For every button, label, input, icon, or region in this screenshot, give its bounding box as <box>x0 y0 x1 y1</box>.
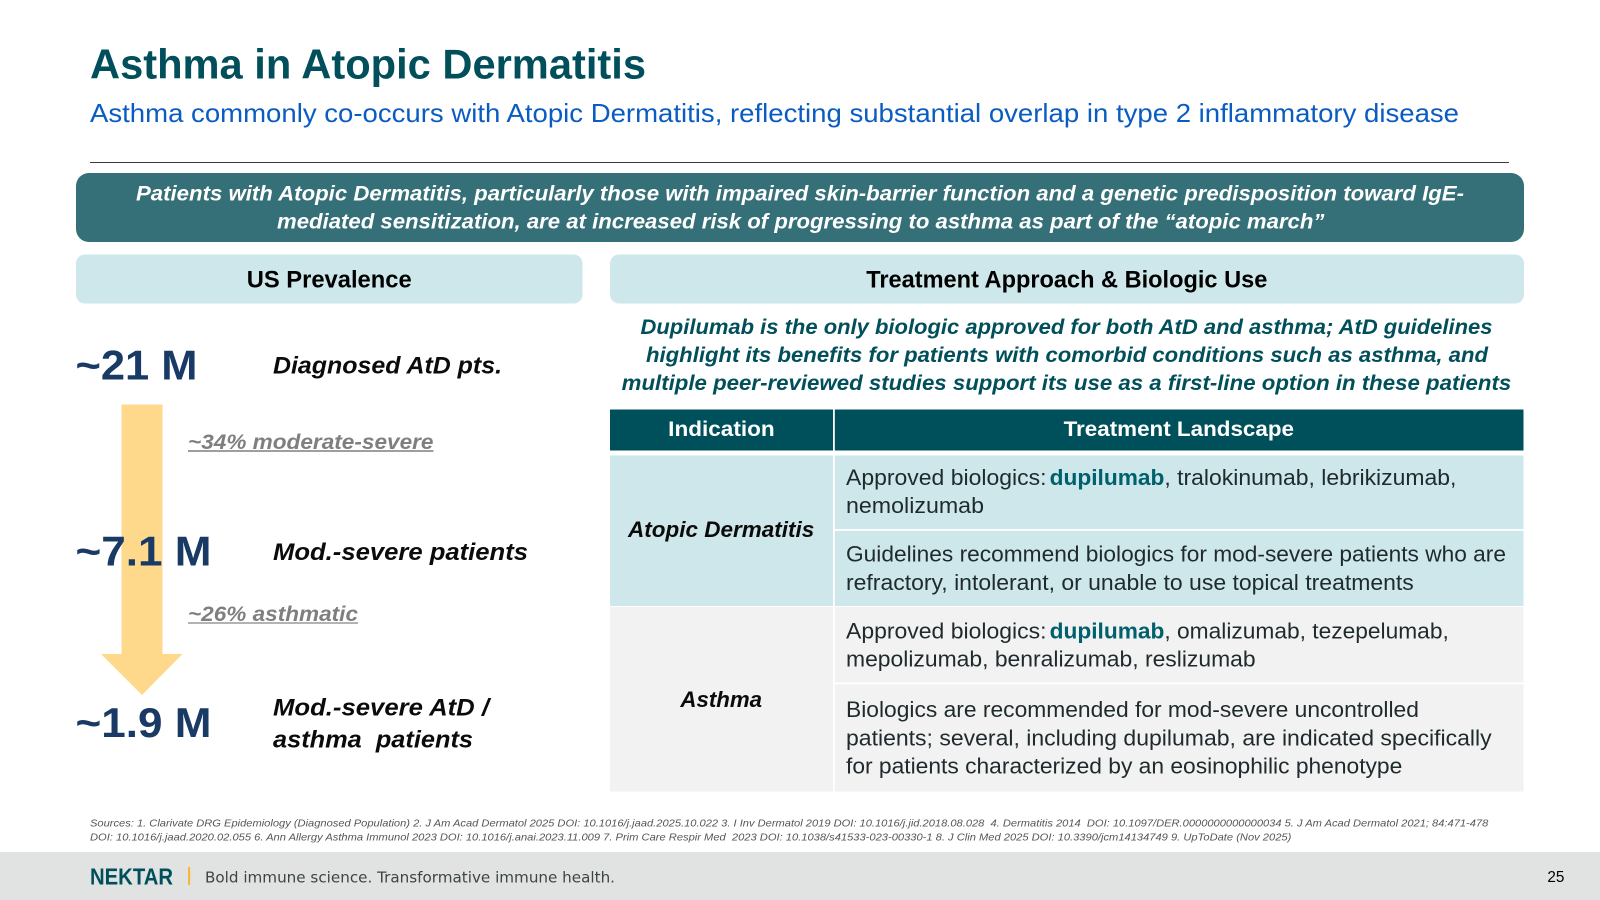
dupilumab statement <box>622 315 1511 395</box>
stat: 21 M diagnosed <box>76 342 502 388</box>
row group: Asthma: Asthma <box>679 687 762 712</box>
subtitle: Asthma commonly co-occurs with Atopic Dermatitis, reflecting substantial overlap in type 2 inflammatory disease <box>90 98 1459 128</box>
panel heading: US Prevalence <box>76 254 582 304</box>
title: Asthma in Atopic Dermatitis <box>90 40 646 88</box>
row group: Asthma: Biologics are recommended for mod-severe uncontrolled <box>846 697 1419 722</box>
tagline: Bold immune science. Transformative immune health. <box>205 868 615 886</box>
row group: Atopic Dermatitis: dupilumab <box>1050 465 1164 490</box>
row group: Asthma: for patients characterized by an eosinophilic phenotype <box>846 753 1402 778</box>
row group: Atopic Dermatitis: Approved biologics: <box>846 465 1046 490</box>
panel heading: Treatment Approach <box>610 254 1524 304</box>
row group: Atopic Dermatitis <box>610 456 1524 606</box>
table header <box>610 410 1524 450</box>
stat: 7.1 M moderate-severe <box>76 528 528 574</box>
row group: Asthma: mepolizumab, benralizumab, reslizumab <box>846 647 1256 672</box>
row group: Atopic Dermatitis: nemolizumab <box>846 493 984 518</box>
dupilumab statement: highlight its benefits for patients with comorbid conditions such as asthma, and <box>646 343 1489 367</box>
stat: 7.1 M moderate-severe: Mod.-severe patients <box>273 539 528 566</box>
row group: Asthma: Approved biologics: <box>846 618 1046 643</box>
stat: 21 M diagnosed: ~21 M <box>76 342 198 388</box>
row group: Asthma <box>610 607 1524 792</box>
treatment table <box>610 410 1524 792</box>
row group: Asthma: patients; several, including dupilumab, are indicated specifically <box>846 725 1492 750</box>
table header: Indication <box>668 418 775 441</box>
banner: atopic march callout: mediated sensitization, are at increased risk of progressing to asthma as part of the “atopic march” <box>277 210 1325 234</box>
logo: Nektar: NEKTAR <box>90 863 173 889</box>
stat: 1.9 M AtD and asthma: Mod.-severe AtD / <box>273 694 491 722</box>
banner: atopic march callout <box>76 173 1524 242</box>
panel heading: Treatment Approach: Treatment Approach & Biologic Use <box>866 266 1267 294</box>
sources footnote: DOI: 10.1016/j.jaad.2020.02.055 6. Ann Allergy Asthma Immunol 2023 DOI: 10.1016/j.anai.2023.11.009 7. Prim Care Respir Med 2023 DOI: 10.1038/s41533-023-00330-1 8. J Clin Med 2025 DOI: 10.3390/jcm14134749 9. UpToDate (Nov 2025) <box>90 832 1291 844</box>
panel heading: US Prevalence: US Prevalence <box>247 266 412 294</box>
row group: Atopic Dermatitis: Atopic Dermatitis <box>627 517 814 542</box>
stat: 7.1 M moderate-severe: ~7.1 M <box>76 528 212 574</box>
conversion: 34% moderate-severe: ~34% moderate-severe <box>188 431 434 454</box>
row group: Asthma: dupilumab <box>1050 618 1164 643</box>
sources footnote <box>90 818 1488 844</box>
row group: Atopic Dermatitis: , tralokinumab, lebrikizumab, <box>1164 465 1456 490</box>
table header: Treatment Landscape <box>1064 418 1294 441</box>
row group: Atopic Dermatitis: refractory, intolerant, or unable to use topical treatments <box>846 570 1414 595</box>
row group: Atopic Dermatitis: Guidelines recommend biologics for mod-severe patients who are <box>846 542 1506 567</box>
arrow: prevalence funnel <box>101 404 182 695</box>
dupilumab statement: multiple peer-reviewed studies support its use as a first-line option in these patients <box>622 371 1511 395</box>
stat: 1.9 M AtD and asthma <box>76 694 491 754</box>
dupilumab statement: Dupilumab is the only biologic approved for both AtD and asthma; AtD guidelines <box>640 315 1493 339</box>
stat: 21 M diagnosed: Diagnosed AtD pts. <box>273 352 502 380</box>
sources footnote: Sources: 1. Clarivate DRG Epidemiology (Diagnosed Population) 2. J Am Acad Dermatol 2025 DOI: 10.1016/j.jaad.2025.10.022 3. I Inv Dermatol 2019 DOI: 10.1016/j.jid.2018.08.028 4. Dermatitis 2014 DOI: 10.1097/DER.0000000000000034 5. J Am Acad Dermatol 2021; 84:471-478 <box>90 818 1488 830</box>
banner: atopic march callout: Patients with Atopic Dermatitis, particularly those with impaired skin-barrier function and a genetic predisposition toward IgE- <box>136 182 1464 206</box>
footer bar <box>0 852 1600 900</box>
stat: 1.9 M AtD and asthma: asthma patients <box>273 726 473 754</box>
conversion: 26% asthmatic: ~26% asthmatic <box>188 603 358 626</box>
row group: Asthma: , omalizumab, tezepelumab, <box>1164 618 1449 643</box>
page number: 25 <box>1547 869 1564 886</box>
stat: 1.9 M AtD and asthma: ~1.9 M <box>76 699 212 746</box>
